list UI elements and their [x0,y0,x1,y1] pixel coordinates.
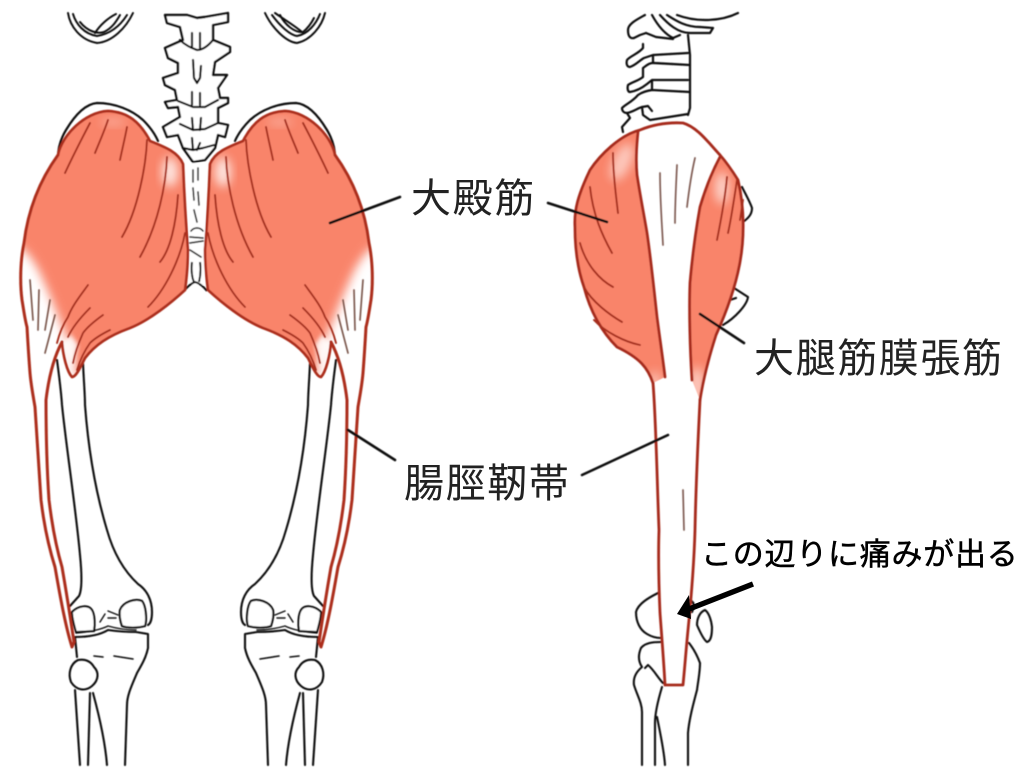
ilium outline [58,103,158,157]
small bone behind thigh [723,187,752,325]
condyles [72,600,146,632]
muscle outline and iliotibial tract [21,111,188,647]
side spine and ribs [622,13,738,132]
back view skeleton and gluteal muscles [0,13,393,765]
gluteus maximus fill [0,100,205,385]
pelvis fragments [68,13,325,43]
label: gluteus maximus: 大殿筋 [411,177,536,221]
sacrum [184,163,207,291]
femur [57,360,152,625]
knee joint and tibia [70,611,148,765]
callout: pain location: この辺りに痛みが出る [701,537,1018,572]
label: iliotibial band: 腸脛靭帯 [404,462,570,506]
label: tensor fasciae latae: 大腿筋膜張筋 [754,337,1004,381]
side muscle fibres [580,153,743,345]
side muscle outline and iliotibial tract [575,123,743,685]
side knee and lower leg bones [634,593,712,765]
left leg [0,100,205,765]
side view skeleton and muscles [560,13,760,765]
tensor fasciae latae and gluteus fill [576,132,742,397]
tendon fibres [660,158,695,530]
right leg (mirror) [188,100,393,765]
muscle fibres [57,120,185,370]
leader lines [330,197,744,475]
arrow: points to the knee [677,584,753,619]
lumbar spine [163,13,230,162]
